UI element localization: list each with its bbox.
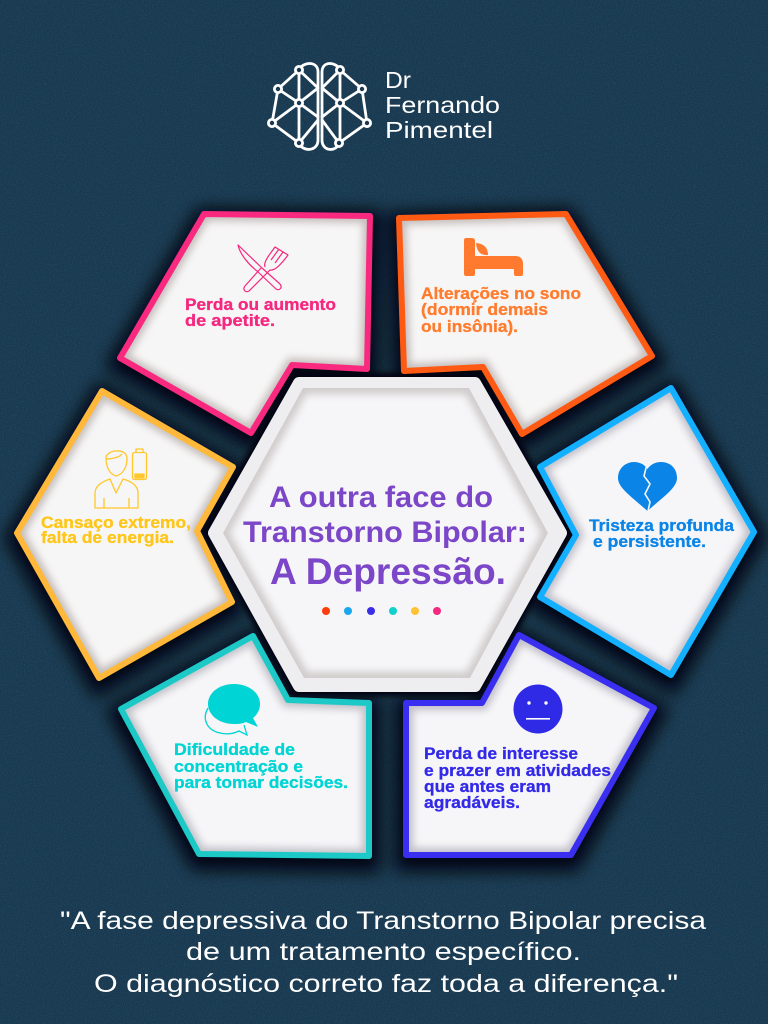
quote: O diagnóstico correto faz toda a diferença." (94, 970, 678, 998)
panel: center hexagon (214, 383, 561, 686)
icon: bed (464, 238, 523, 276)
text: loss of interest: agradáveis. (424, 794, 520, 812)
title: Transtorno Bipolar: (243, 516, 527, 549)
icon: speech bubbles (205, 684, 260, 735)
text: loss of interest (424, 745, 611, 812)
logo text: Fernando (385, 92, 500, 118)
text: fatigue: falta de energia. (41, 529, 174, 547)
text: loss of interest: Perda de interesse (424, 745, 578, 763)
icon: tired person with low battery (95, 449, 146, 508)
text: loss of interest: e prazer em atividades (424, 762, 611, 780)
text: loss of interest: que antes eram (424, 778, 551, 796)
logo text (385, 67, 500, 143)
text: sleep: Alterações no sono (421, 285, 581, 303)
text: fatigue: Cansaço extremo, (41, 514, 191, 532)
text: fatigue (41, 514, 191, 547)
text: concentration (174, 741, 348, 792)
logo icon: brain network (268, 64, 371, 149)
colored dots (322, 607, 441, 615)
icon: broken heart (618, 462, 677, 511)
text: sleep: ou insônia). (421, 318, 518, 336)
text: sadness: e persistente. (593, 533, 706, 551)
text: appetite (185, 296, 336, 330)
text: sadness: Tristeza profunda (589, 517, 735, 535)
logo text: Pimentel (385, 117, 493, 143)
text: appetite: de apetite. (185, 312, 275, 330)
quote: "A fase depressiva do Transtorno Bipolar precisa (60, 907, 706, 935)
panel: fatigue (17, 391, 233, 678)
text: concentration: para tomar decisões. (174, 774, 348, 792)
text: concentration: Dificuldade de (174, 741, 295, 759)
panel: concentration (121, 636, 369, 856)
quote: de um tratamento específico. (186, 938, 581, 966)
panel: sleep (399, 214, 652, 434)
text: sleep (421, 285, 581, 336)
text: appetite: Perda ou aumento (185, 296, 336, 314)
logo (268, 64, 500, 149)
logo text: Dr (385, 67, 411, 93)
title: A outra face do (269, 481, 493, 514)
title (243, 481, 527, 592)
panel: appetite (120, 214, 370, 433)
panel: loss of interest (406, 635, 654, 855)
text: concentration: concentração e (174, 758, 303, 776)
icon: neutral face (514, 684, 562, 734)
text: sadness (589, 517, 735, 551)
text: sleep: (dormir demais (421, 301, 548, 319)
panel: sadness (540, 388, 754, 675)
quote (60, 907, 706, 998)
icon: knife and fork (238, 245, 288, 292)
title: A Depressão. (270, 551, 506, 592)
tray shadows (17, 219, 754, 861)
